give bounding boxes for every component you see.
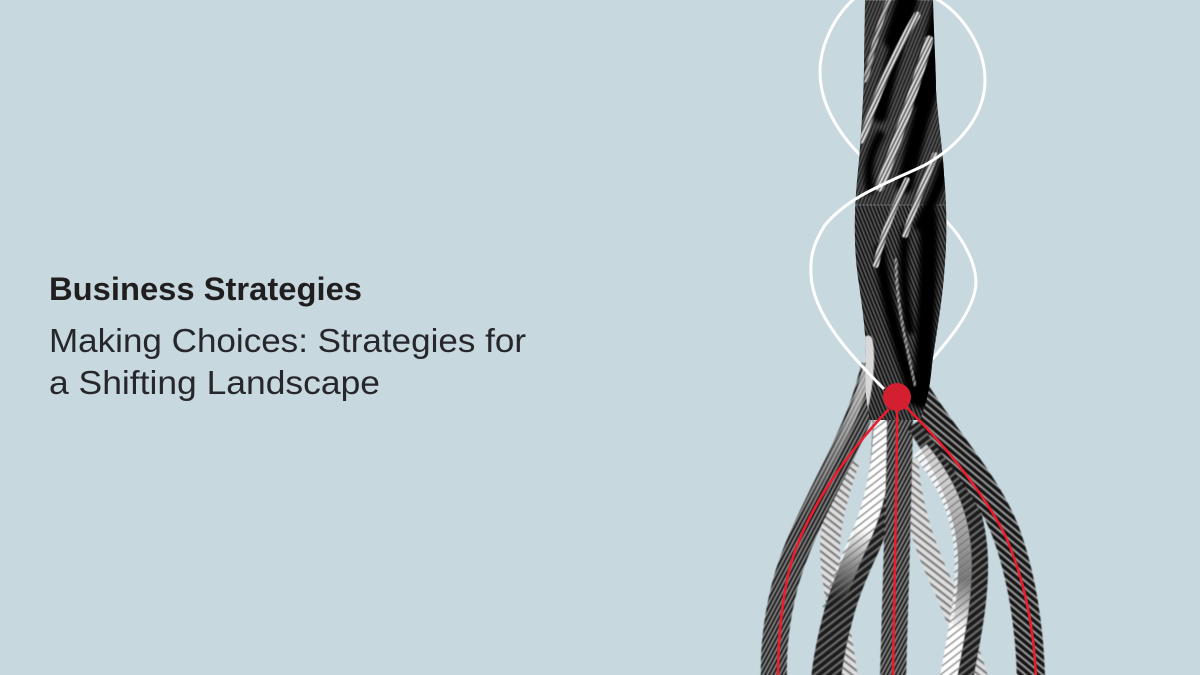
red node <box>883 383 911 411</box>
white loop: upper left, passing behind cable <box>820 0 861 156</box>
separated wire strands fanning out below the knot <box>774 365 1031 675</box>
subtitle: two-line text block: Making Choices: Strategies for <box>49 323 526 360</box>
dark shadow bands <box>869 0 948 400</box>
strand: bright front centre-left <box>826 405 888 675</box>
subtitle: two-line text block: a Shifting Landscape <box>49 365 380 402</box>
strand: right, carrying red line <box>912 385 1031 675</box>
strand: left, carrying red line <box>774 365 874 675</box>
strand: right front, lit <box>920 420 973 675</box>
subtitle: two-line text block <box>49 323 526 402</box>
strand: light back left <box>830 460 850 675</box>
bright helical bands <box>862 0 935 415</box>
strand: centre, dark <box>893 405 900 675</box>
white loop: lower right, passing behind cable <box>907 221 976 388</box>
title: Business Strategies: Business Strategies <box>49 271 362 307</box>
white curve: crosses over cable and forms lower-left loop <box>811 0 985 389</box>
strand: light back right <box>908 460 978 675</box>
twisted cable body <box>850 0 950 425</box>
red lines: three paths diverging from node <box>778 407 1036 675</box>
